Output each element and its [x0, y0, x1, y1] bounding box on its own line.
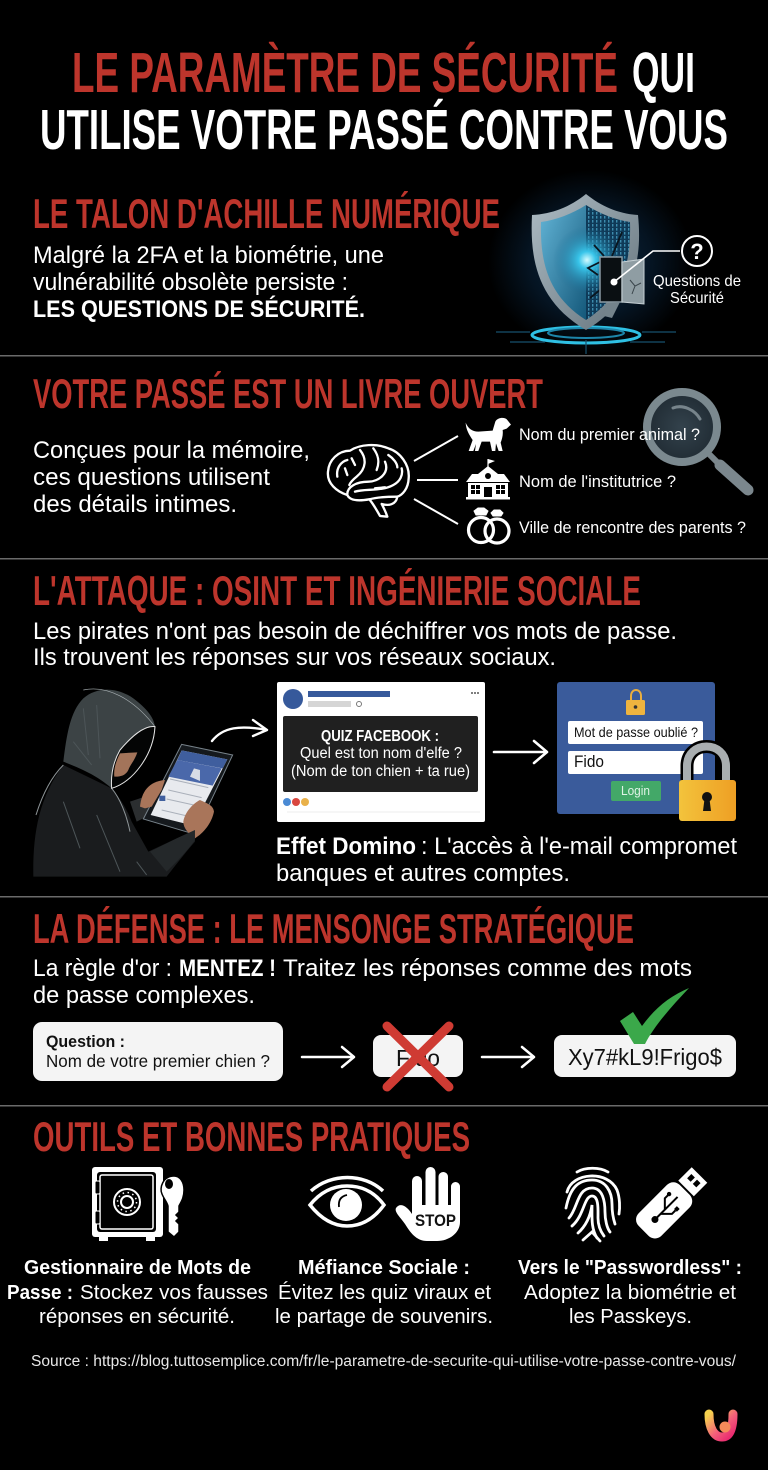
text block: mémoire: ces questions utilisent: [33, 464, 270, 491]
text block: pirates: Les pirates n'ont pas besoin de déchiffrer vos mots de passe.: [33, 618, 677, 645]
caption: méfiance: [275, 1256, 493, 1328]
question labels: [519, 426, 746, 537]
caption: gestionnaire: Passe :: [7, 1281, 73, 1304]
panel: facebook quiz post: Quel est ton nom d'elfe ?: [300, 745, 462, 762]
title: QUI: [632, 41, 695, 105]
text block: vulnérabilité: Malgré la 2FA et la biométrie, une: [33, 242, 384, 269]
panel: outils et bonnes pratiques: [7, 1113, 742, 1328]
text block: vulnérabilité: [33, 242, 384, 323]
panel: l'attaque: [33, 567, 737, 887]
panel: facebook quiz post: (Nom de ton chien + ta rue): [291, 763, 470, 780]
text block: effet domino: : L'accès à l'e-mail compromet: [421, 833, 737, 860]
icon: eye: [310, 1178, 384, 1226]
illustration: hooded hacker with tablet: [33, 689, 233, 877]
card: question: Nom de votre premier chien ?: [46, 1051, 270, 1071]
panel: login form: Fido: [574, 753, 604, 771]
icon: stop hand: [396, 1167, 460, 1241]
question labels: Ville de rencontre des parents ?: [519, 519, 746, 537]
heading: talon d'Achille: LE TALON D'ACHILLE NUMÉRIQUE: [33, 190, 500, 237]
arrow: post to login: [494, 741, 547, 763]
text block: règle d'or: La règle d'or :: [33, 955, 172, 982]
text block: mémoire: [33, 437, 310, 518]
caption: méfiance: le partage de souvenirs.: [275, 1305, 493, 1328]
text block: mémoire: Conçues pour la mémoire,: [33, 437, 310, 464]
text block: règle d'or: de passe complexes.: [33, 982, 255, 1009]
text block: effet domino: banques et autres comptes.: [276, 860, 570, 887]
caption: passwordless: Vers le "Passwordless" :: [518, 1256, 742, 1279]
source: Source : https://blog.tuttosemplice.com/fr/le-parametre-de-securite-qui-utilise-votre-passe-contre-vous/: [31, 1353, 737, 1370]
icon: dog: [466, 418, 511, 451]
panel: login form: Login: [621, 784, 650, 798]
caption: gestionnaire: Gestionnaire de Mots de: [24, 1256, 251, 1279]
icon: cracked shield: ?: [690, 239, 704, 264]
card: question: Question :: [46, 1032, 125, 1051]
panel: la défense: [33, 905, 736, 1087]
icon: fingerprint: [566, 1168, 620, 1241]
text block: vulnérabilité: LES QUESTIONS DE SÉCURITÉ.: [33, 295, 365, 323]
arrow: hacker to post: [212, 720, 267, 741]
connector lines: [414, 436, 458, 524]
shield glow background: [488, 170, 693, 354]
icon: safe and key: [92, 1167, 184, 1241]
icon: cracked shield: [496, 194, 741, 354]
text block: vulnérabilité: vulnérabilité obsolète persiste :: [33, 269, 348, 296]
card: fido crossed out: [373, 1026, 463, 1087]
icon: rings: [468, 508, 509, 543]
caption: méfiance: Méfiance Sociale :: [298, 1256, 470, 1279]
text block: pirates: [33, 618, 677, 671]
icon: brain: [328, 445, 409, 517]
panel: votre passé: [33, 370, 748, 543]
logo: [709, 1414, 733, 1437]
card: strong answer with check: Xy7#kL9!Frigo$: [568, 1044, 722, 1070]
icon: school: [466, 459, 510, 500]
caption: passwordless: les Passkeys.: [569, 1305, 692, 1328]
icon: big padlock: [679, 746, 736, 821]
caption: gestionnaire: réponses en sécurité.: [39, 1305, 235, 1328]
panel: facebook quiz post: [277, 682, 485, 822]
caption: passwordless: [518, 1256, 742, 1328]
text block: effet domino: Effet Domino: [276, 833, 416, 860]
panel: login form: [557, 682, 736, 821]
heading: outils: OUTILS ET BONNES PRATIQUES: [33, 1113, 470, 1160]
card: question: [33, 1022, 283, 1081]
text block: mémoire: des détails intimes.: [33, 491, 237, 518]
text block: règle d'or: MENTEZ !: [179, 955, 276, 982]
icon: stop hand: STOP: [415, 1211, 456, 1230]
card: fido crossed out: Fido: [396, 1045, 440, 1071]
question labels: Nom de l'institutrice ?: [519, 473, 676, 491]
arrow: [482, 1047, 534, 1067]
icon: usb key: [632, 1164, 711, 1242]
icon: cracked shield: Sécurité: [670, 290, 724, 307]
panel: login form: Mot de passe oublié ?: [574, 724, 698, 740]
icon: cracked shield: Questions de: [653, 273, 741, 290]
panel: le talon d'Achille: [33, 170, 741, 354]
panel: facebook quiz post: QUIZ FACEBOOK :: [321, 728, 439, 745]
text block: pirates: Ils trouvent les réponses sur vos réseaux sociaux.: [33, 644, 556, 671]
text block: effet domino: [276, 833, 737, 887]
caption: méfiance: Évitez les quiz viraux et: [278, 1281, 491, 1304]
text block: règle d'or: [33, 955, 692, 1009]
card: strong answer with check: [554, 988, 736, 1077]
caption: passwordless: Adoptez la biométrie et: [524, 1281, 736, 1304]
text block: règle d'or: Traitez les réponses comme des mots: [283, 955, 692, 982]
icon: magnifying glass: [647, 392, 748, 490]
question labels: Nom du premier animal ?: [519, 426, 700, 444]
caption: gestionnaire: Stockez vos fausses: [80, 1281, 268, 1304]
arrow: [302, 1047, 354, 1067]
caption: gestionnaire: [7, 1256, 268, 1328]
title: [40, 41, 728, 162]
